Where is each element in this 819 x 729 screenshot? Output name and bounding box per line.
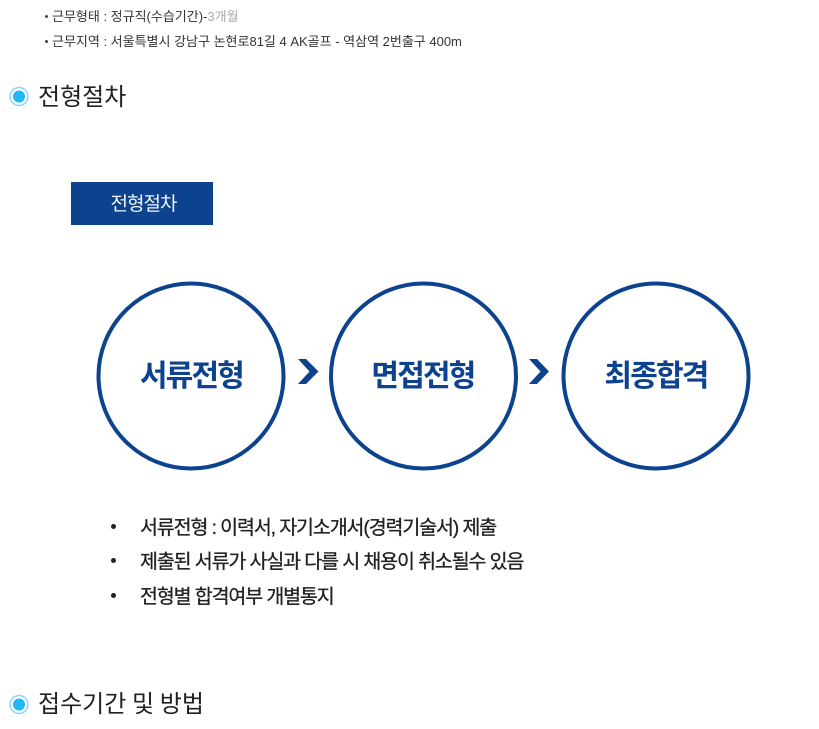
step 2: interview: 면접전형	[371, 360, 475, 393]
step 3: final acceptance: 최종합격	[604, 360, 708, 393]
note 1: 서류전형 : 이력서, 자기소개서(경력기술서) 제출	[140, 517, 496, 539]
arrow 2	[529, 359, 549, 384]
bullet list of process notes	[111, 517, 524, 608]
heading: selection process: 전형절차	[38, 84, 126, 111]
step 1: document screening	[98, 284, 284, 468]
heading: application period and method: 접수기간 및 방법	[38, 691, 204, 718]
process flow diagram	[96, 282, 750, 470]
step 3: final acceptance	[564, 284, 748, 468]
label box: selection process	[71, 182, 213, 225]
arrow 1	[298, 359, 318, 384]
employment type line: 근무형태 : 정규직(수습기간)-3개월	[52, 9, 239, 24]
icon: section radio bullet 2	[9, 694, 29, 714]
note 2: 제출된 서류가 사실과 다를 시 채용이 취소될수 있음	[140, 551, 523, 573]
icon: section radio bullet 1	[9, 86, 29, 106]
label box: selection process: 전형절차	[111, 194, 176, 215]
work location line: 근무지역 : 서울특별시 강남구 논현로81길 4 AK골프 - 역삼역 2번출구 400m	[52, 34, 462, 49]
note 3: 전형별 합격여부 개별통지	[140, 586, 334, 608]
step 1: document screening: 서류전형	[140, 360, 243, 393]
step 2: interview	[331, 284, 516, 468]
